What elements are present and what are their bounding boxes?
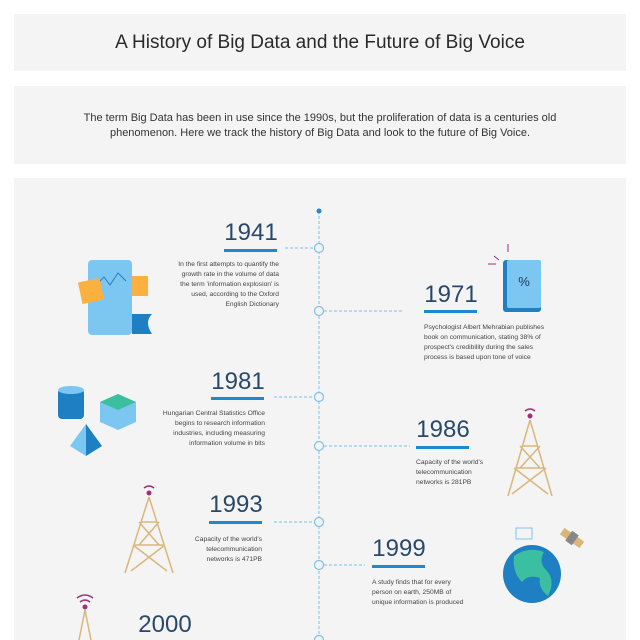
timeline axis <box>316 208 322 640</box>
title: A History of Big Data and the Future of Big Voice <box>115 32 525 53</box>
event 1986: 1986 <box>416 416 470 443</box>
event 1981: 1981 <box>211 368 265 395</box>
event 1971: book on communication, stating 38% of <box>424 334 541 341</box>
event 1999: A study finds that for every <box>372 579 451 586</box>
event 2000: 2000 <box>138 611 192 638</box>
icon: tower 1986 <box>508 409 552 496</box>
event 1993 <box>195 491 324 563</box>
event 1971: 1971 <box>424 281 478 308</box>
intro panel <box>14 86 626 164</box>
event 1999: person on earth, 250MB of <box>372 589 451 596</box>
event 1986: telecommunication <box>416 469 472 476</box>
event 1941: In the first attempts to quantify the <box>178 261 279 268</box>
event 1971: prospect's credibility during the sales <box>424 344 534 351</box>
event 2000 <box>138 611 324 640</box>
event 1971: Psychologist Albert Mehrabian publishes <box>424 324 545 331</box>
timeline panel <box>14 178 626 640</box>
event 1986: Capacity of the world's <box>416 459 484 466</box>
event 1941: the term 'information explosion' is <box>180 281 280 288</box>
icon: tower 1993 <box>125 486 173 573</box>
event 1981: Hungarian Central Statistics Office <box>163 410 265 417</box>
icon: book: % <box>518 274 530 289</box>
event 1981: begins to research information <box>175 420 265 427</box>
event 1981 <box>163 368 324 447</box>
icon: book <box>488 244 541 312</box>
event 1993: Capacity of the world's <box>195 536 263 543</box>
event 1986: networks is 281PB <box>416 479 472 486</box>
event 1999: 1999 <box>372 535 426 562</box>
event 1993: 1993 <box>209 491 263 518</box>
event 1981: information volume in bits <box>189 440 266 447</box>
event 1941: English Dictionary <box>225 301 280 308</box>
event 1999: unique information is produced <box>372 599 464 606</box>
event 1981: industries, including measuring <box>173 430 265 437</box>
event 1941: 1941 <box>224 219 278 246</box>
event 1941: used, according to the Oxford <box>191 291 279 298</box>
event 1986 <box>314 416 484 486</box>
event 1993: networks is 471PB <box>207 556 263 563</box>
icon: globe <box>503 526 585 603</box>
event 1999 <box>314 535 464 606</box>
event 1971 <box>314 281 545 361</box>
event 1971: process is based upon tone of voice <box>424 354 531 361</box>
event 1993: telecommunication <box>206 546 262 553</box>
intro text: The term Big Data has been in use since the 1990s, but the proliferation of data is a centuries old phenomenon. Here we track the history of Big Data and look to the future of Big Voice. <box>84 112 556 139</box>
icon: document chart <box>78 260 152 335</box>
event 1941 <box>178 219 324 308</box>
icon: tower 2000 <box>77 595 93 640</box>
icon: shapes <box>58 386 136 456</box>
title panel <box>14 14 626 71</box>
event 1941: growth rate in the volume of data <box>182 271 279 278</box>
